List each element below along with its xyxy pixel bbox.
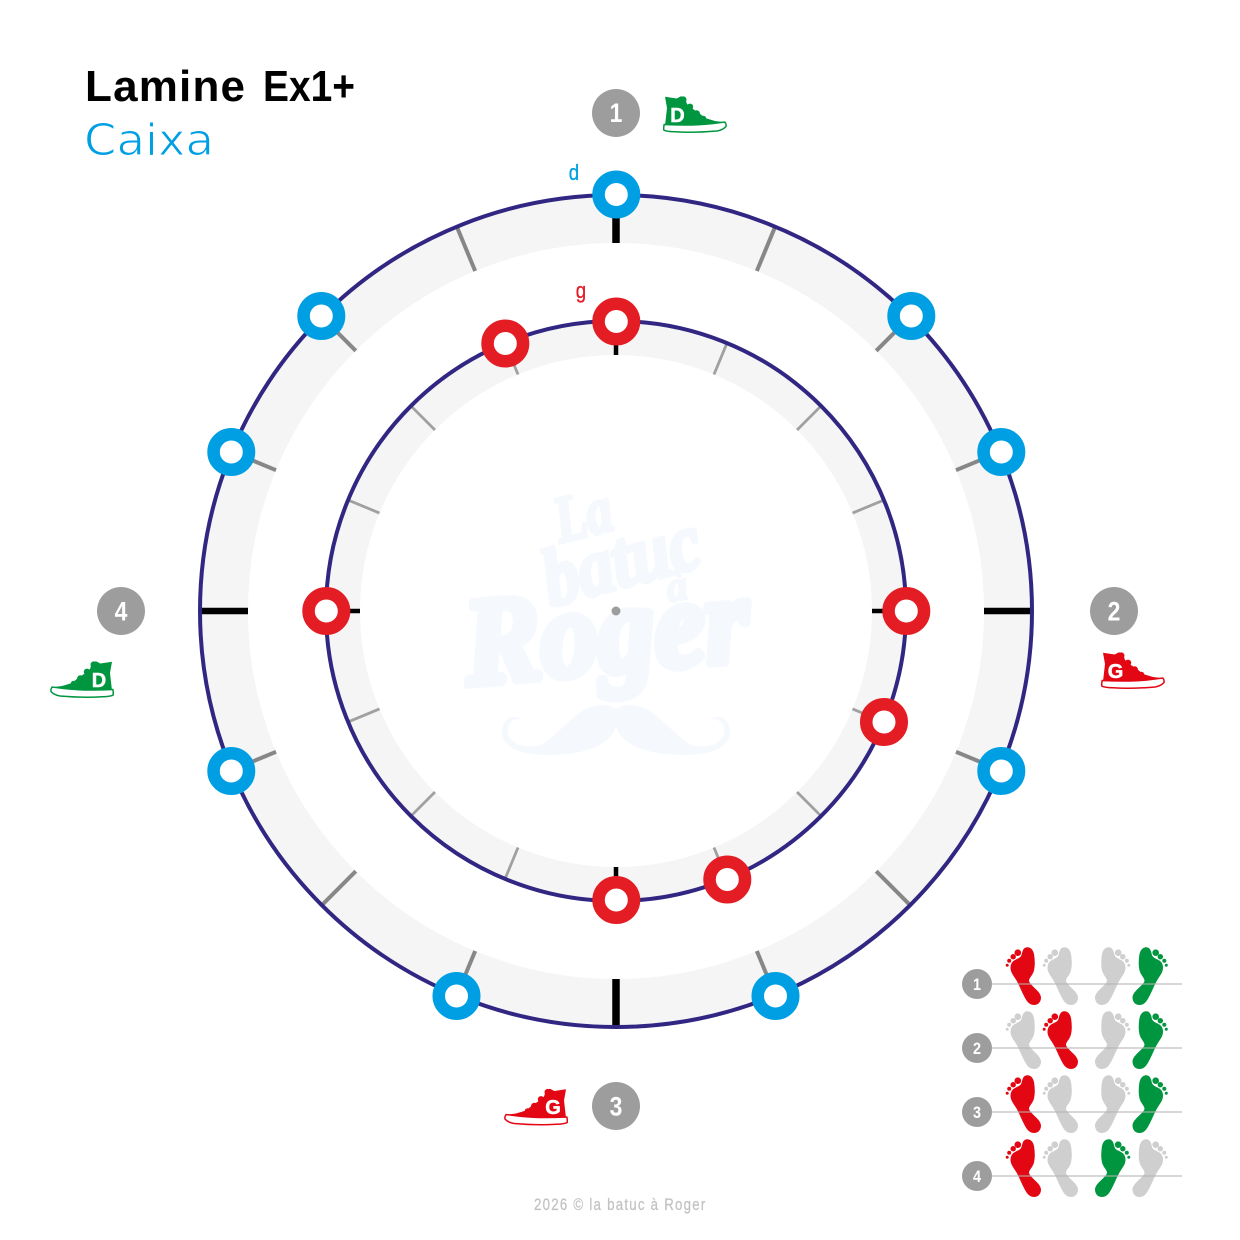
legend: footsteps per beat [962, 947, 1182, 1197]
icon: red shoe G, beat 3: G [545, 1097, 561, 1119]
icon: green shoe D, beat 4: D [92, 670, 106, 692]
beat 2 badge [1090, 587, 1138, 635]
icon: green shoe D, beat 1 [664, 96, 726, 132]
beat 1 badge: 1 [610, 98, 622, 128]
panel: outer ring (right hand, caixa d) [200, 195, 1032, 1027]
icon: red shoe G, beat 3 [505, 1089, 567, 1125]
label: d: d [569, 162, 579, 185]
watermark: la batuc à Roger logo [458, 473, 756, 755]
legend row 1 [962, 947, 1182, 1005]
watermark: la batuc à Roger logo: Roger [458, 550, 756, 711]
watermark: la batuc à Roger logo: à [662, 563, 691, 612]
icon: green shoe D, beat 4 [51, 661, 113, 697]
center dot [612, 606, 620, 616]
title [85, 62, 355, 111]
icon: red shoe G, beat 2: G [1108, 661, 1123, 683]
icon: green shoe D, beat 1: D [670, 105, 685, 127]
legend row 2 [962, 1011, 1182, 1069]
legend row 1: 1 [973, 976, 981, 994]
legend row 4 [962, 1139, 1182, 1197]
footer credit: 2026 © la batuc à Roger [534, 1196, 707, 1214]
watermark: la batuc à Roger logo: La [545, 473, 620, 558]
legend row 3 [962, 1075, 1182, 1133]
watermark: la batuc à Roger logo: batuc [532, 495, 710, 624]
icon: red shoe G, beat 2 [1102, 652, 1164, 688]
beat 4 badge: 4 [115, 597, 127, 627]
panel: inner ring (left hand, caixa g) [326, 321, 906, 901]
red hit markers on inner ring [309, 304, 924, 918]
beat 3 badge [592, 1082, 640, 1130]
beat 4 badge [97, 587, 145, 635]
legend row 4: 4 [973, 1168, 981, 1186]
label: g: g [576, 280, 586, 303]
beat 3 badge: 3 [610, 1092, 622, 1122]
legend row 3: 3 [973, 1104, 981, 1122]
legend row 2: 2 [973, 1040, 981, 1058]
title: Ex1+ [263, 62, 355, 111]
beat 2 badge: 2 [1108, 597, 1120, 627]
subtitle: Caixa [84, 115, 214, 166]
beat 1 badge [592, 89, 640, 137]
title: Lamine [85, 62, 245, 111]
blue hit markers on outer ring [214, 177, 1019, 1014]
